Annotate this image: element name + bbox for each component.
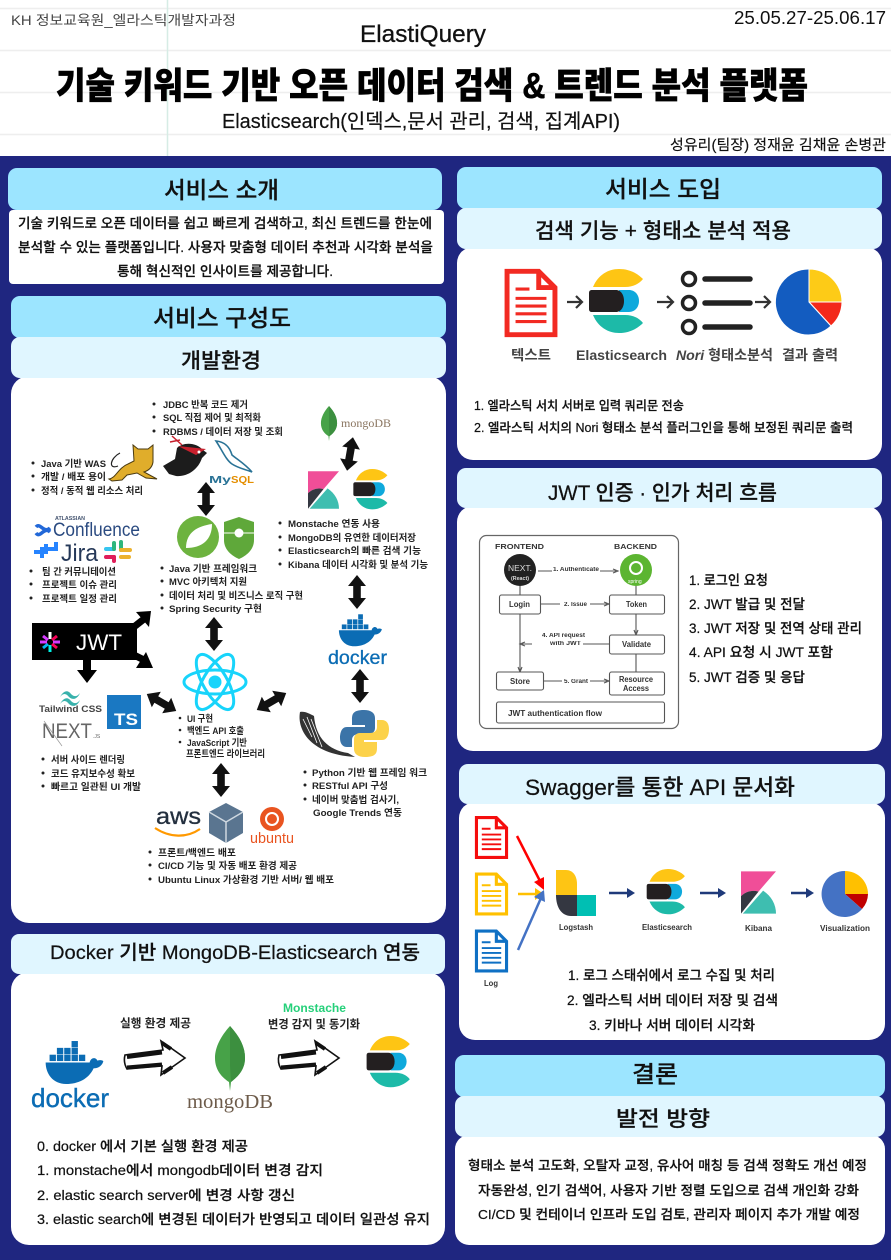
text: react bullets: UI 구현 [187, 713, 213, 725]
icon: elasticsearch small [353, 469, 387, 509]
text: python bullets [304, 767, 427, 819]
panel body [459, 802, 885, 1040]
icon: tailwind [39, 691, 102, 714]
arrow: docker to mongodb [124, 1041, 185, 1075]
text: deployment bullets [148, 847, 334, 886]
icon: docker large [31, 1041, 109, 1113]
arrow [791, 888, 814, 898]
text: collaboration bullets: 프로젝트 일정 관리 [42, 593, 117, 605]
arrow: react to next [142, 686, 181, 719]
heading bar: dev environment: 개발환경 [181, 350, 261, 373]
text: react bullets [179, 713, 265, 760]
icon: kibana: Kibana [745, 924, 773, 933]
icon: elasticsearch: Elasticsearch [642, 923, 692, 932]
icon: docker small: docker [328, 648, 388, 669]
numbered description: 0. docker 에서 기본 실행 환경 제공 [37, 1139, 248, 1154]
project date: 25.05.27-25.06.17 [734, 8, 886, 28]
text: tomcat bullets: 개발 / 배포 용이 [41, 471, 106, 483]
icon: mysql: SQL [231, 474, 255, 486]
heading bar: swagger [459, 764, 885, 804]
icon: elasticsearch [642, 869, 692, 932]
heading bar: conclusion: 결론 [632, 1061, 678, 1087]
jwt badge with arrows: JWT [76, 630, 122, 655]
icon: spring logo [177, 516, 219, 558]
text: spring bullets: 데이터 처리 및 비즈니스 로직 구현 [169, 590, 303, 602]
icon: react [184, 649, 246, 715]
panel: docker mongodb elasticsearch [11, 934, 445, 1245]
numbered steps: 1. 로그인 요청 [689, 573, 768, 588]
icon: mongodb large: mongoDB [187, 1091, 273, 1113]
main title: 기술 키워드 기반 오픈 데이터 검색 & 트렌드 분석 플랫폼 [56, 65, 808, 106]
architecture body [11, 376, 446, 923]
text: spring bullets: MVC 아키텍처 지원 [169, 576, 247, 588]
flow labels: JWT authentication flow [508, 709, 603, 718]
heading bar: search and morphology [457, 208, 882, 249]
text: elk bullets: Monstache 연동 사용 [288, 518, 380, 530]
text: deployment bullets: Ubuntu Linux 가상환경 기반 서버/ 웹 배포 [158, 874, 334, 886]
heading bar: future direction: 발전 방향 [616, 1108, 710, 1131]
text: deployment bullets: CI/CD 기능 및 자동 배포 환경 제공 [158, 860, 297, 872]
label: runtime environment: 실행 환경 제공 [120, 1016, 191, 1030]
subtitle: Elasticsearch(인덱스,문서 관리, 검색, 집계API) [222, 110, 620, 133]
arrow: mybatis to spring [197, 482, 215, 516]
labels: Nori 형태소분석 [676, 347, 773, 363]
text: mybatis bullets: SQL 직접 제어 및 최적화 [163, 412, 261, 424]
icon: next react: (React) [511, 576, 529, 582]
heading bar: docker integration [11, 934, 445, 974]
icon: next react: NEXT. [508, 564, 532, 573]
arrow: react to python [252, 685, 291, 718]
numbered description: 3. elastic search에 변경된 데이터가 반영되고 데이터 일관성 유지 [37, 1212, 430, 1227]
heading bar: architecture [11, 296, 446, 338]
labels: 텍스트 [511, 347, 551, 363]
text: tomcat bullets: 정적 / 동적 웹 리소스 처리 [41, 485, 143, 497]
text: elk bullets: MongoDB의 유연한 데이터저장 [288, 532, 416, 544]
text: deployment bullets: 프론트/백엔드 배포 [158, 847, 236, 859]
icon: virtualbox [209, 803, 243, 843]
panel: conclusion [455, 1055, 885, 1245]
flow labels: with JWT [549, 641, 581, 647]
numbered steps: 2. JWT 발급 및 전달 [689, 597, 805, 612]
numbered description: 2. elastic search server에 변경 사항 갱신 [37, 1188, 295, 1203]
numbered description: 1. 엘라스틱 서치 서버로 입력 쿼리문 전송 [474, 399, 684, 413]
icon: pie chart [820, 871, 870, 933]
icon: mongodb small [321, 406, 391, 441]
flow labels: 2. Issue [564, 602, 588, 608]
text: elk bullets: Kibana 데이터 시각화 및 분석 기능 [288, 559, 428, 571]
arrows: logs to logstash [517, 836, 545, 950]
label: monstache sync [268, 1003, 360, 1031]
text: frontend bullets: 코드 유지보수성 확보 [51, 768, 135, 780]
numbered description [37, 1139, 430, 1227]
labels: 결과 출력 [782, 347, 838, 363]
numbered description: 2. 엘라스틱 서치의 Nori 형태소 분석 플러그인을 통해 보정된 쿼리문 출력 [474, 420, 853, 435]
jwt flow diagram [480, 536, 678, 728]
icon: elasticsearch [589, 269, 643, 333]
heading bar: dev environment [11, 337, 446, 378]
arrow [609, 888, 635, 898]
numbered steps [689, 573, 862, 685]
icon: spring boot [620, 554, 652, 586]
icon: python [340, 710, 389, 757]
numbered description: 1. monstache에서 mongodb데이터 변경 감지 [37, 1163, 323, 1178]
text: react bullets: 백엔드 API 호출 [187, 725, 244, 737]
icon: mysql: My [209, 474, 231, 486]
flow labels [508, 567, 654, 718]
icon: text document [507, 271, 555, 335]
text: frontend bullets: 서버 사이드 렌더링 [51, 754, 125, 766]
icon: next react [504, 554, 536, 586]
conclusion text: 자동완성, 인기 검색어, 사용자 기반 정렬 도입으로 검색 개인화 강화 [478, 1183, 859, 1198]
poster header [11, 8, 886, 154]
text: collaboration bullets: 프로젝트 이슈 관리 [42, 580, 117, 591]
jwt flow diagram: FRONTEND [495, 544, 544, 551]
numbered description: 3. 키바나 서버 데이터 시각화 [589, 1018, 756, 1033]
text: python bullets: 네이버 맞춤법 검사기, [312, 794, 399, 806]
icon: nori list [682, 272, 750, 334]
text: spring bullets [160, 563, 303, 615]
jwt badge with arrows [32, 611, 153, 683]
text: collaboration bullets: 팀 간 커뮤니테이션 [42, 566, 116, 578]
flow labels: 5. Grant [564, 679, 588, 685]
icon: ubuntu: ubuntu [250, 830, 294, 847]
icon: kibana [741, 871, 776, 933]
arrow: docker to python [351, 669, 369, 703]
icon: pie result [775, 269, 842, 335]
icon: flask [300, 712, 355, 757]
flow labels: Access [623, 684, 650, 693]
panel: service architecture [11, 296, 446, 923]
flow lines [518, 569, 638, 683]
arrow [700, 888, 726, 898]
numbered steps: 3. JWT 저장 및 전역 상태 관리 [689, 621, 862, 636]
numbered description: 2. 엘라스틱 서버 데이터 저장 및 검색 [567, 993, 778, 1008]
intro text: 분석할 수 있는 플랫폼입니다. 사용자 맞춤형 데이터 추천과 시각화 분석을 [18, 239, 433, 255]
text: elk bullets [278, 518, 428, 571]
arrow [755, 296, 770, 308]
arrow: mongodb to elk [338, 436, 362, 472]
icon: nextjs: .JS [93, 734, 101, 740]
flow boxes [496, 595, 664, 723]
text: tomcat bullets [32, 458, 143, 497]
flow labels: Login [509, 600, 530, 609]
conclusion text: 형태소 분석 고도화, 오탈자 교정, 유사어 매칭 등 검색 정확도 개선 예정 [468, 1158, 867, 1173]
heading bar: service intro: 서비스 소개 [164, 177, 279, 203]
icon: docker large: docker [31, 1083, 109, 1113]
icon: mongodb small: mongoDB [341, 416, 391, 430]
icon: mysql [209, 441, 255, 486]
heading bar: conclusion [455, 1055, 885, 1097]
heading bar: future direction [455, 1096, 885, 1137]
intro text: 기술 키워드로 오픈 데이터를 쉽고 빠르게 검색하고, 최신 트렌드를 한눈에 [18, 216, 432, 231]
icon: tailwind: Tailwind CSS [39, 704, 102, 714]
icon: confluence and jira logos [34, 516, 140, 567]
numbered steps: 4. API 요청 시 JWT 포함 [689, 645, 833, 660]
numbered description [474, 399, 853, 435]
icon: aws: aws [156, 803, 201, 829]
text: python bullets: Google Trends 연동 [313, 807, 402, 819]
text: spring bullets: Java 기반 프레임워크 [169, 563, 257, 575]
text: collaboration bullets [30, 566, 117, 605]
pipeline diagram [507, 269, 842, 363]
icon: confluence and jira logos: ATLASSIAN [55, 516, 85, 522]
panel body [11, 972, 445, 1245]
labels [511, 347, 838, 363]
icon: typescript [107, 695, 141, 729]
icon: docker small [328, 614, 388, 669]
arrow: react to aws [212, 763, 230, 797]
icon: slack [104, 540, 132, 563]
jwt flow diagram: BACKEND [614, 544, 657, 551]
panel: swagger api docs [459, 764, 885, 1040]
icon: confluence and jira logos: Confluence [53, 520, 140, 541]
conclusion text [468, 1158, 867, 1222]
flow labels: Resource [619, 675, 654, 684]
panel: service adoption [457, 167, 882, 460]
text: react bullets: JavaScript 기반 [187, 737, 247, 749]
text: mybatis bullets [152, 399, 283, 438]
panel body [457, 247, 882, 460]
team members: 성유리(팀장) 정재윤 김채윤 손병관 [670, 137, 886, 154]
course label: KH 정보교육원_엘라스틱개발자과정 [11, 13, 236, 28]
text: mybatis bullets: JDBC 반복 코드 제거 [163, 399, 248, 411]
icon: spring boot: spring [628, 579, 642, 585]
heading bar: jwt: JWT 인증 · 인가 처리 흐름 [548, 482, 777, 505]
panel: jwt flow [457, 468, 882, 751]
label: monstache sync: Monstache [283, 1003, 346, 1015]
arrow: spring to react [205, 617, 223, 651]
icon: spring security shield [224, 517, 254, 559]
icon: mybatis bird [163, 436, 207, 476]
heading bar: docker integration: Docker 기반 MongoDB-Elasticsearch 연동 [50, 942, 420, 964]
heading bar: search and morphology: 검색 기능 + 형태소 분석 적용 [535, 220, 791, 243]
text: python bullets: RESTful API 구성 [312, 781, 388, 792]
flow labels: Store [510, 677, 531, 686]
intro text: 통해 혁신적인 인사이트를 제공합니다. [117, 264, 333, 279]
arrow: elk to docker [348, 575, 366, 609]
icon: ubuntu [250, 807, 294, 847]
panel body [457, 506, 882, 751]
icon: confluence and jira logos: Jira [61, 540, 99, 567]
labels: Elasticsearch [576, 347, 667, 363]
heading bar: jwt [457, 468, 882, 508]
text: python bullets: Python 기반 웹 프레임 워크 [312, 767, 427, 779]
icon: tomcat [109, 445, 157, 481]
numbered steps: 5. JWT 검증 및 응답 [689, 670, 805, 685]
icon: pie chart: Visualization [820, 924, 870, 933]
text: react bullets: 프론트엔드 라이브러리 [186, 748, 265, 760]
heading bar: service adoption: 서비스 도입 [605, 176, 721, 202]
panel body [455, 1135, 885, 1245]
heading bar: service intro [8, 168, 442, 210]
heading bar: service adoption [457, 167, 882, 209]
icon: logstash [556, 870, 596, 932]
icon: mongodb large [187, 1026, 273, 1113]
arrow: mongodb to elasticsearch [278, 1041, 339, 1075]
conclusion text: CI/CD 및 컨테이너 인프라 도입 검토, 관리자 페이지 추가 개발 예정 [478, 1207, 860, 1222]
text: mybatis bullets: RDBMS / 데이터 저장 및 조회 [163, 426, 283, 438]
text: elk bullets: Elasticsearch의 빠른 검색 기능 [288, 545, 421, 557]
label: monstache sync: 변경 감지 및 동기화 [268, 1017, 360, 1031]
arrow [567, 296, 582, 308]
icon: typescript: TS [114, 710, 138, 729]
numbered description: 1. 로그 스태쉬에서 로그 수집 및 처리 [568, 968, 775, 983]
flow labels: Token [626, 600, 647, 609]
icon: log documents: Log [484, 979, 498, 988]
icon: kibana small [308, 471, 339, 509]
intro text [9, 210, 444, 284]
flow labels: Validate [622, 640, 652, 649]
icon: log documents [476, 818, 507, 988]
panel: service intro [8, 168, 444, 284]
flow labels: 1. Authenticate [553, 567, 600, 573]
icon: logstash: Logstash [559, 923, 593, 932]
icon: elasticsearch large [367, 1036, 410, 1087]
text: frontend bullets [42, 754, 141, 793]
heading bar: swagger: Swagger를 통한 API 문서화 [525, 775, 795, 800]
text: tomcat bullets: Java 기반 WAS [41, 458, 107, 470]
project name: ElastiQuery [360, 21, 486, 48]
arrow [657, 296, 673, 308]
text: frontend bullets: 빠르고 일관된 UI 개발 [51, 781, 141, 793]
text: spring bullets: Spring Security 구현 [169, 603, 262, 615]
numbered description [567, 968, 778, 1033]
flow labels: 4. API request [542, 633, 585, 639]
icon: nextjs: NEXT [42, 720, 92, 743]
heading bar: architecture: 서비스 구성도 [153, 305, 291, 331]
